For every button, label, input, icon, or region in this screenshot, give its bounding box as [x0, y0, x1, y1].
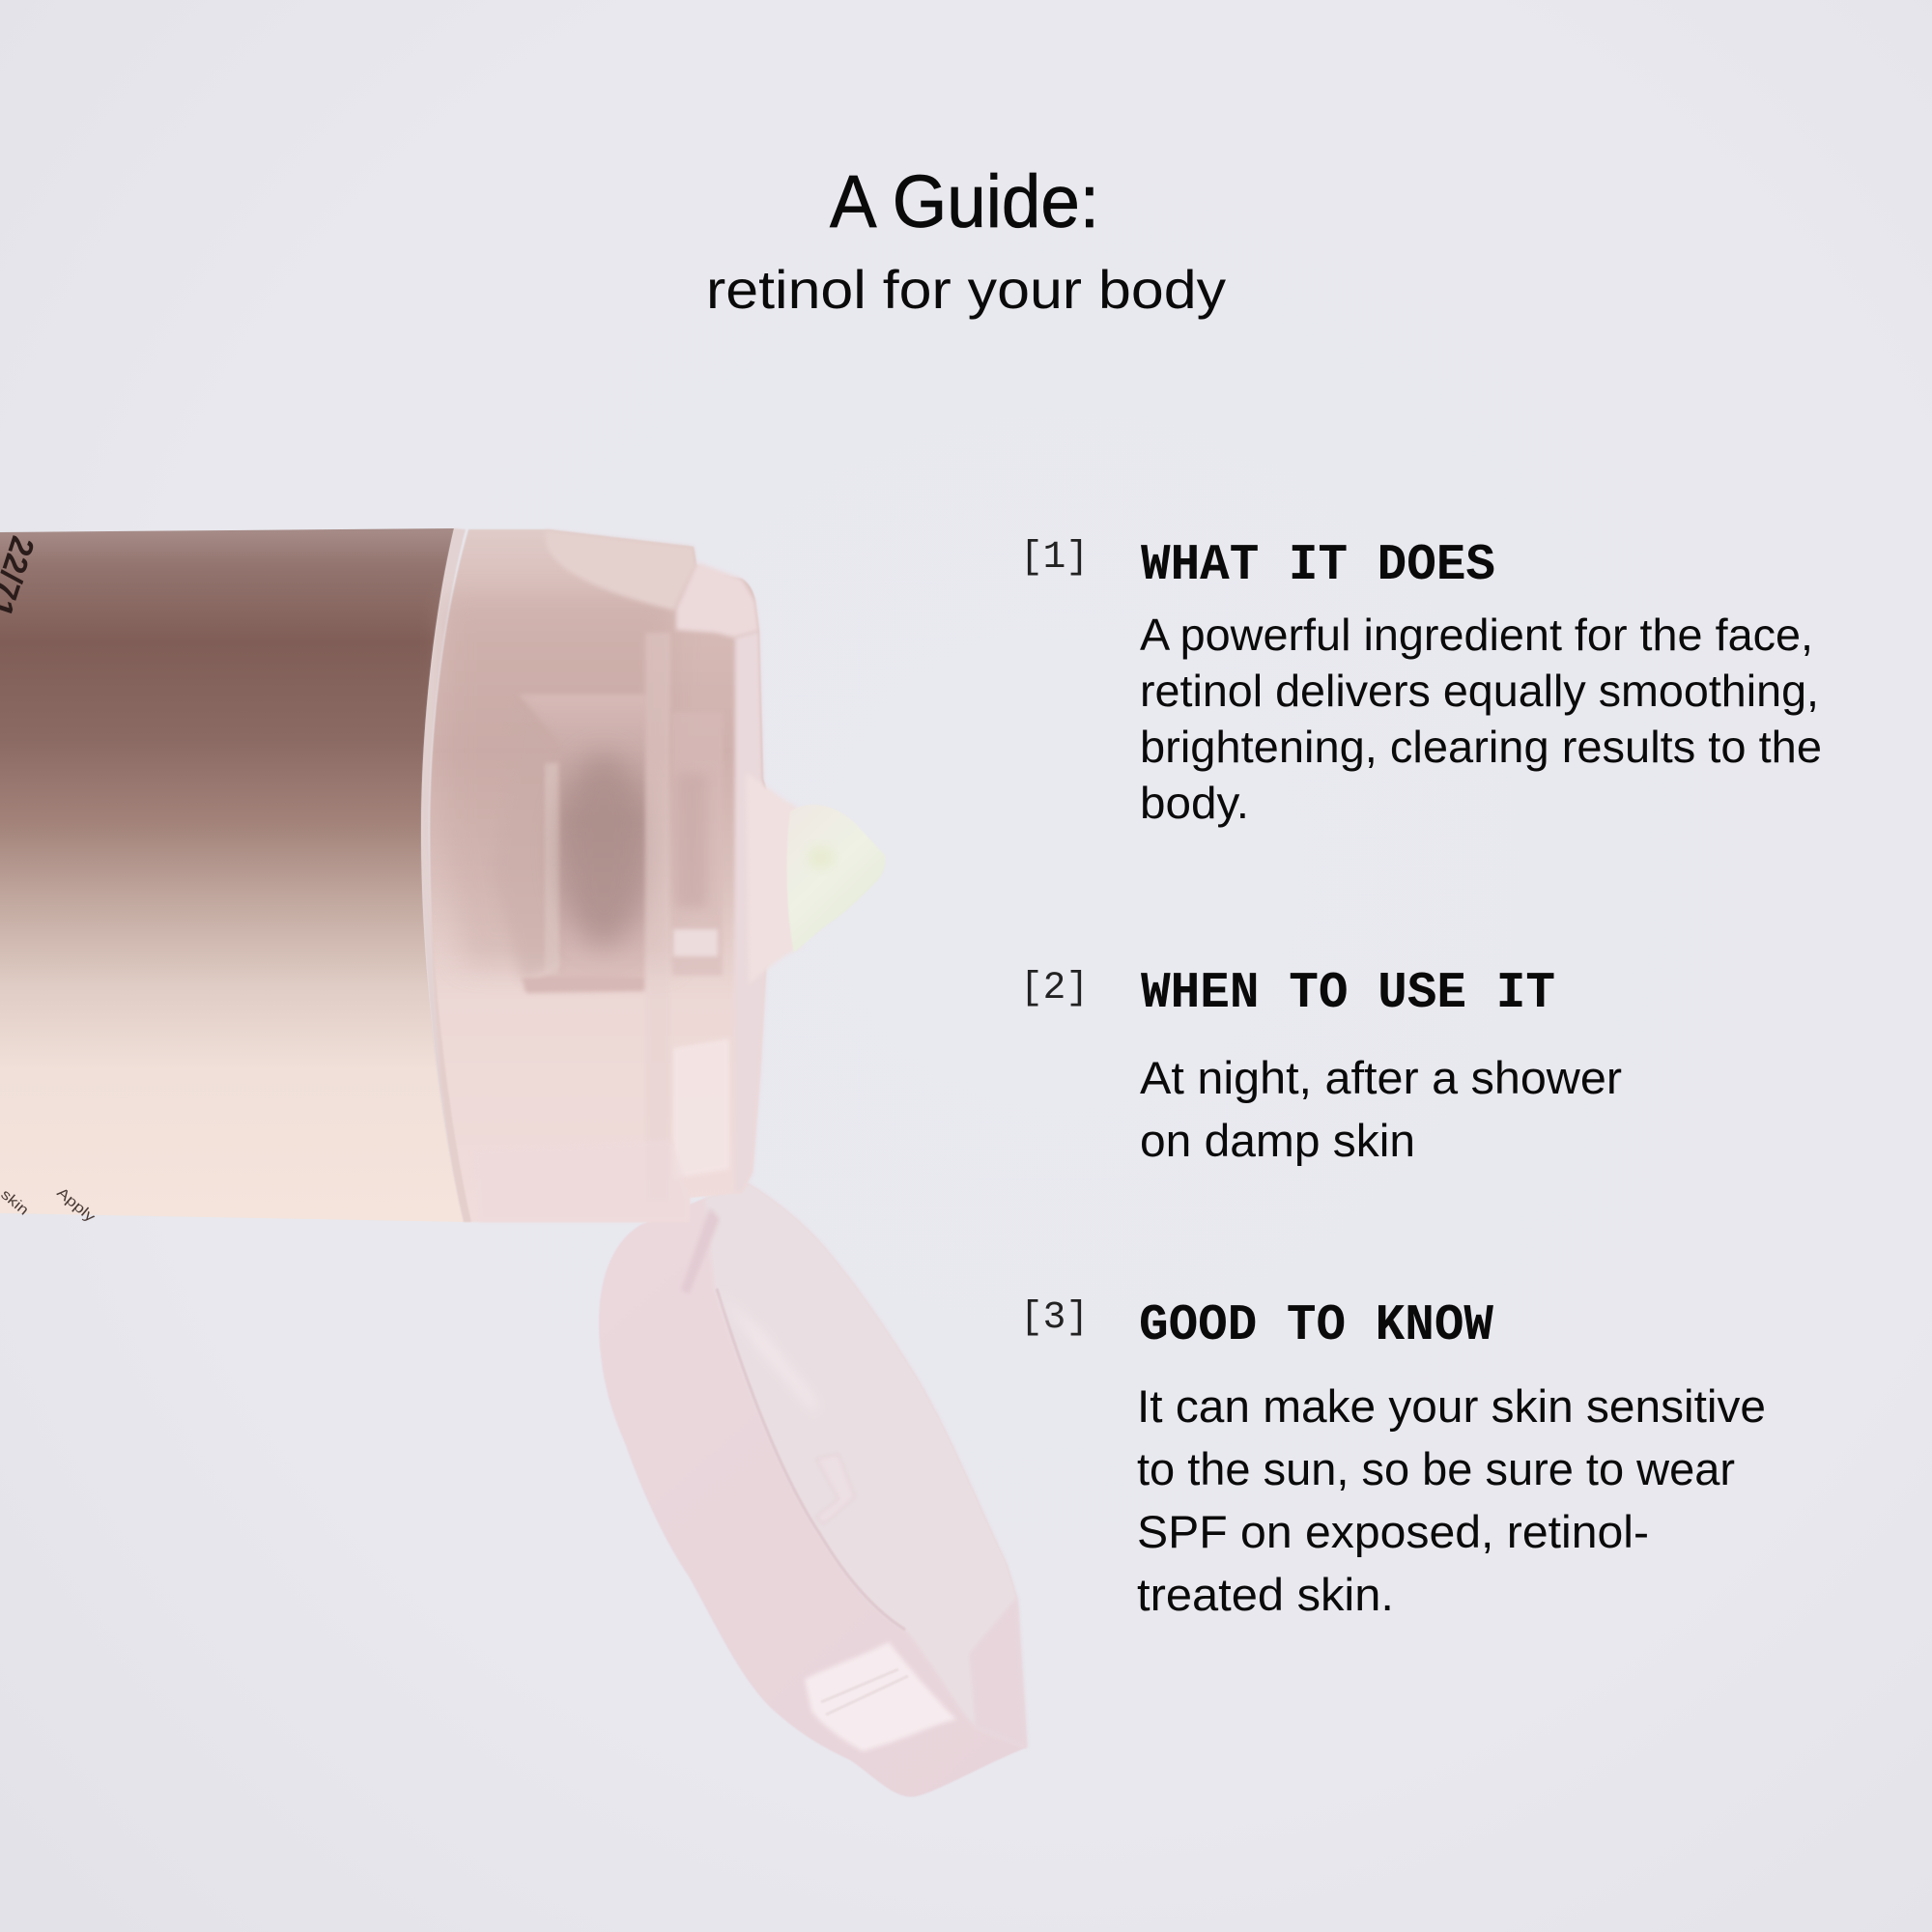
inner block: [519, 695, 645, 990]
body 1: A powerful ingredient for the face,: [1140, 610, 1813, 660]
lid rim shadow line: [717, 1289, 905, 1630]
number 3: [3]: [1020, 1296, 1089, 1340]
cream highlight: [808, 846, 835, 869]
body 1: body.: [1140, 778, 1249, 828]
cream and nozzle: [746, 773, 885, 985]
tube print bottom: [0, 1184, 99, 1226]
body 3: It can make your skin sensitive: [1137, 1380, 1766, 1432]
heading 3: GOOD TO KNOW: [1139, 1296, 1493, 1354]
number 1: [1]: [1020, 536, 1089, 580]
body 3: SPF on exposed, retinol-: [1137, 1506, 1649, 1557]
inner block left light edge: [545, 763, 558, 976]
body 3: [1137, 1380, 1766, 1620]
section 3: good to know: [1020, 1296, 1766, 1620]
section 2: when to use it: [1020, 964, 1622, 1166]
heading 2: WHEN TO USE IT: [1141, 964, 1555, 1022]
lid rim band: [705, 1183, 1027, 1747]
body 3: to the sun, so be sure to wear: [1137, 1443, 1735, 1494]
tube print bottom: Apply: [53, 1184, 99, 1226]
inner block bottom line: [522, 976, 645, 993]
number 2: [2]: [1020, 967, 1089, 1010]
title: A Guide:: [830, 160, 1099, 243]
lid top highlight: [720, 1294, 816, 1415]
body 3: treated skin.: [1137, 1569, 1394, 1620]
lid corner facet: [969, 1597, 1027, 1747]
photo: open tube with flip lid: [0, 528, 1027, 1797]
transparent cap: [421, 528, 766, 1222]
cap top tab: [545, 530, 696, 611]
cream blob: [787, 805, 885, 952]
right window shade: [676, 773, 707, 908]
body 2: [1140, 1052, 1622, 1166]
cap inner tinted area: [444, 599, 672, 966]
cap top corner: [676, 562, 759, 638]
right edge wall: [734, 631, 766, 1193]
lid highlight stripes: [821, 1669, 908, 1715]
body 2: At night, after a shower: [1140, 1052, 1622, 1103]
subtitle: retinol for your body: [706, 259, 1226, 320]
inner dark shade: [560, 753, 647, 947]
cap lower band: [473, 1140, 690, 1222]
body 2: on damp skin: [1140, 1115, 1415, 1166]
vertical light band: [645, 633, 670, 1203]
heading 1: WHAT IT DOES: [1141, 536, 1495, 594]
window highlight: [673, 929, 718, 956]
lid: [599, 1183, 1027, 1797]
inner block left facet: [493, 695, 560, 980]
lower window highlight: [673, 1038, 729, 1179]
right window: [672, 712, 723, 976]
lid highlight: [805, 1642, 956, 1751]
cap ring edge: [421, 528, 471, 1222]
section 1: what it does: [1020, 536, 1822, 828]
tube body: [0, 528, 464, 1222]
lid small tab: [816, 1454, 855, 1524]
body 1: retinol delivers equally smoothing,: [1140, 666, 1819, 716]
lid hinge: [681, 1208, 720, 1294]
body 1: [1140, 610, 1822, 828]
body 1: brightening, clearing results to the: [1140, 722, 1822, 772]
